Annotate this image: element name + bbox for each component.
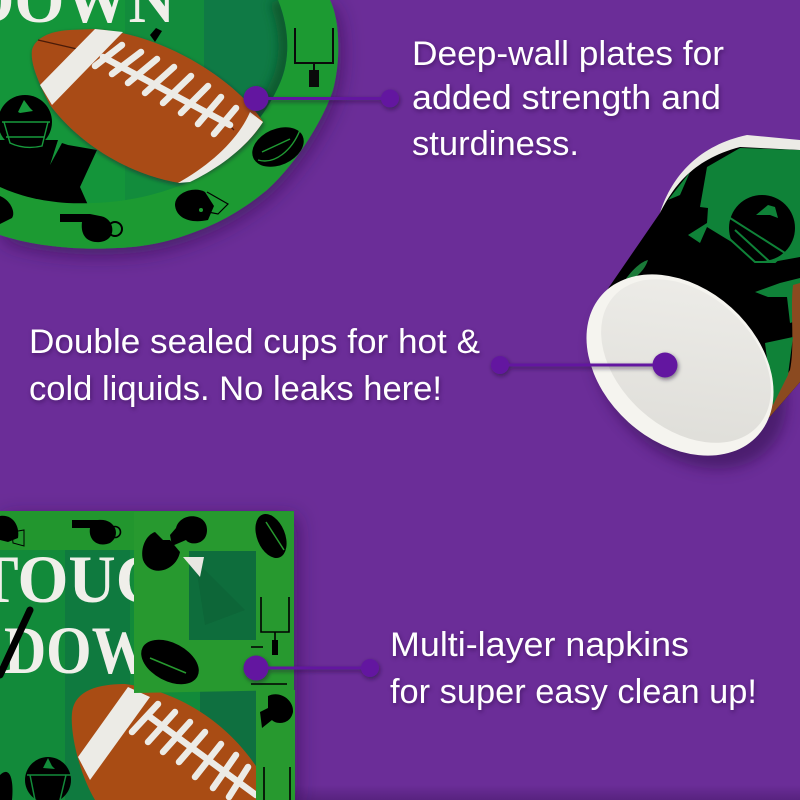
callout: napkins connector: [244, 656, 379, 680]
icon: rim football: [246, 120, 310, 174]
text block: cups: cold liquids. No leaks here!: [29, 370, 442, 408]
football on plate: [32, 29, 263, 183]
icon: whistle: [60, 214, 122, 242]
napkin helmet: [25, 757, 71, 800]
text block: napkins: for super easy clean up!: [390, 673, 757, 711]
text block: cups: Double sealed cups for hot &: [29, 323, 480, 361]
icon: rim helmet: [175, 190, 228, 221]
napkin football: [72, 684, 270, 800]
icon: helmet: [0, 95, 52, 149]
text block: plates: [412, 35, 724, 163]
text block: cups: [29, 323, 480, 408]
callout: cups connector: [491, 352, 678, 378]
text block: plates: Deep-wall plates for: [412, 35, 724, 73]
cup rim: [660, 135, 800, 213]
cup base: [550, 238, 800, 492]
text block: napkins: Multi-layer napkins: [390, 626, 689, 664]
panel: napkin: [0, 509, 295, 800]
text block: plates: sturdiness.: [412, 125, 579, 163]
napkin top icons: [0, 516, 120, 546]
text block: napkins: [390, 626, 757, 711]
icon: cup helmet: [722, 195, 795, 262]
napkin lower right border: [256, 690, 295, 800]
panel: napkin: DOW: [4, 612, 150, 688]
callout: plates connector: [244, 86, 399, 111]
player silhouette: [0, 140, 97, 205]
panel: paper cup: [586, 135, 800, 474]
text block: plates: added strength and: [412, 79, 721, 117]
icon: goal post: [295, 28, 333, 86]
panel: paper plate: [0, 0, 338, 249]
cup body: [600, 140, 800, 430]
napkin flap: [134, 509, 294, 693]
icon: rim left football: [0, 196, 13, 224]
